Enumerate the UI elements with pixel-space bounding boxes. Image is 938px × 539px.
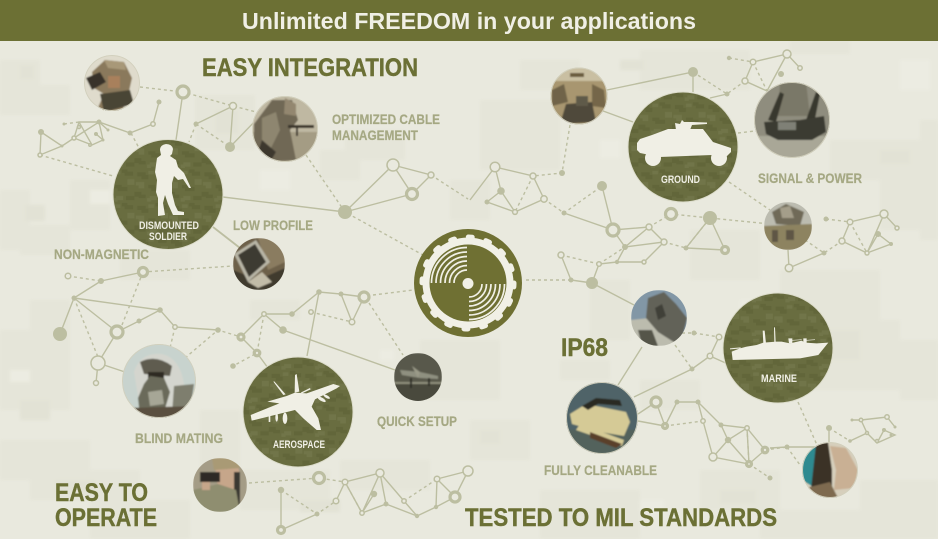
label: blind mating: BLIND MATING <box>135 431 223 446</box>
heading: tested to mil standards: TESTED TO MIL STANDARDS <box>465 504 777 532</box>
central gear icon <box>414 229 522 337</box>
caption: GROUND <box>661 174 700 186</box>
label: signal and power: SIGNAL & POWER <box>758 171 862 186</box>
photo: tracked robot <box>754 82 830 158</box>
icon: soldier silhouette <box>155 144 191 216</box>
heading: easy integration: EASY INTEGRATION <box>202 54 418 82</box>
photo: operator with handheld <box>193 458 247 512</box>
network: top left <box>38 86 468 260</box>
label: quick setup: QUICK SETUP <box>377 414 457 429</box>
network: top right <box>470 50 899 289</box>
label: optimized cable management: OPTIMIZED CABLE <box>332 112 440 127</box>
heading: IP68: IP68 <box>561 334 608 362</box>
label: optimized cable management <box>332 112 440 143</box>
heading: easy to operate <box>55 479 157 532</box>
caption <box>139 220 199 243</box>
label: non-magnetic: NON-MAGNETIC <box>54 247 149 262</box>
caption: MARINE <box>761 373 797 385</box>
caption: SOLDIER <box>149 231 187 243</box>
label: optimized cable management: MANAGEMENT <box>332 128 419 143</box>
header bar <box>0 0 938 41</box>
photo: sniper in prone position <box>252 96 318 162</box>
panel: marine <box>723 293 833 403</box>
caption: DISMOUNTED <box>139 220 199 232</box>
title: Unlimited FREEDOM in your applications <box>242 8 696 34</box>
photo: underwater vehicle <box>566 382 638 454</box>
connector: soldier to low profile photo <box>213 227 240 248</box>
network: bottom left <box>249 466 473 534</box>
network: left middle <box>53 266 413 386</box>
photo: rugged tablet <box>233 238 285 290</box>
heading: easy to operate: EASY TO <box>55 479 148 507</box>
photo: soldier with night vision <box>84 55 140 112</box>
icon: patrol boat silhouette <box>730 327 828 360</box>
heading: easy to operate: OPERATE <box>55 504 157 532</box>
photo: drone in hangar <box>394 353 442 402</box>
photo: pilot with helmet <box>122 344 196 418</box>
icon: fighter jet silhouette <box>251 374 340 430</box>
photo: hand holding radio <box>802 442 858 498</box>
label: low profile: LOW PROFILE <box>233 218 313 233</box>
panel: ground <box>628 92 738 202</box>
photo: warship <box>631 290 687 346</box>
panel: dismounted soldier <box>113 140 223 250</box>
photo: rubble and vehicle <box>764 202 812 250</box>
icon: armored vehicle silhouette <box>637 120 731 166</box>
network: bottom right <box>592 283 896 480</box>
panel: aerospace <box>243 357 353 467</box>
caption: AEROSPACE <box>273 439 325 451</box>
photo: desert convoy <box>550 67 608 125</box>
label: fully cleanable: FULLY CLEANABLE <box>544 463 657 478</box>
